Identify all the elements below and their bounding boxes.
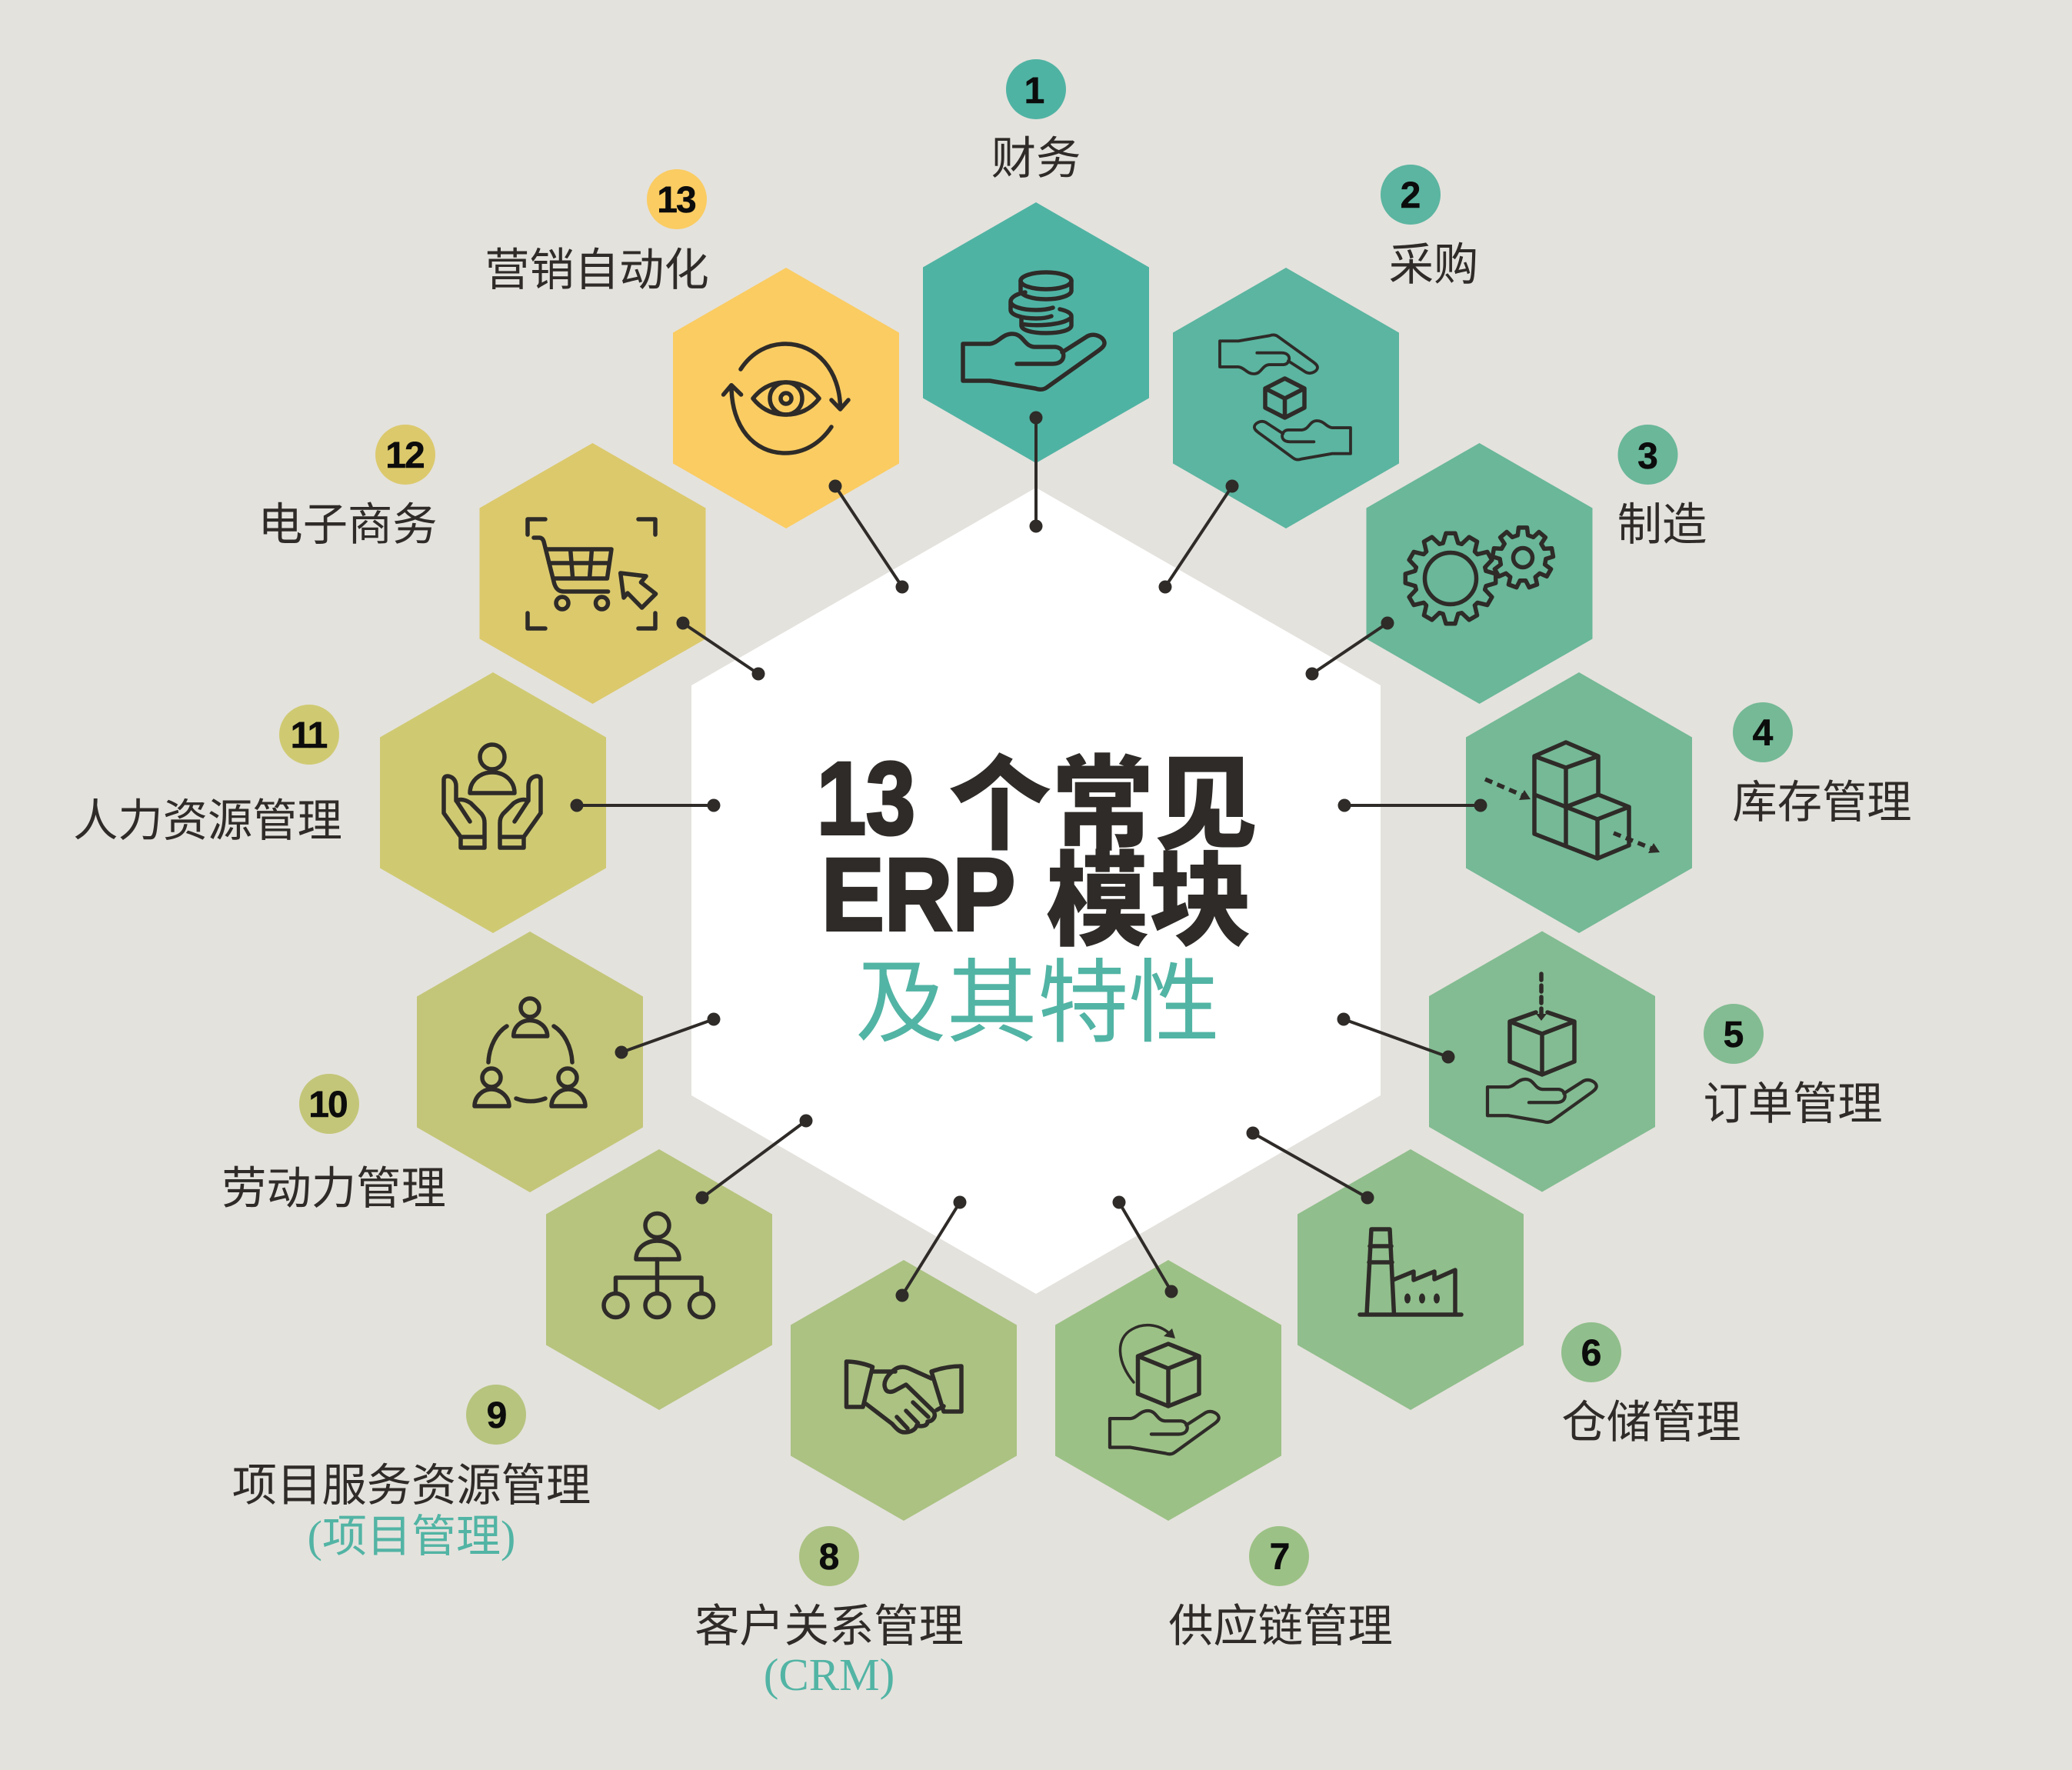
badge 7: 7 — [1270, 1537, 1290, 1578]
icon: handshake — [846, 1362, 961, 1432]
badge 11 — [279, 705, 339, 765]
badge 12: 12 — [385, 435, 424, 476]
label 11: 人力资源管理 — [73, 796, 342, 846]
hexagon 11 — [380, 672, 606, 933]
panel: module 11 human resources — [73, 672, 720, 933]
badge 7 — [1249, 1526, 1309, 1586]
hexagon 3 — [1366, 443, 1592, 704]
badge 2: 2 — [1401, 175, 1421, 216]
title line 3: 及其特性 — [855, 953, 1220, 1055]
icon: box dropping into hand — [1487, 974, 1597, 1122]
label 9: 项目服务资源管理 — [232, 1461, 591, 1511]
title — [817, 742, 1258, 1055]
title line 1: 13 — [817, 742, 915, 856]
badge 12 — [375, 425, 435, 485]
badge 11: 11 — [291, 715, 328, 756]
title line 2: 模块 — [1046, 845, 1252, 959]
panel: module 5 order management — [1337, 931, 1883, 1192]
badge 1 — [1006, 59, 1066, 119]
icon: factory — [1360, 1229, 1461, 1315]
panel: module 6 warehouse — [1246, 1126, 1741, 1448]
badge 8: 8 — [819, 1537, 839, 1578]
icon: hands exchanging box — [1220, 335, 1351, 460]
label 2: 采购 — [1389, 240, 1478, 290]
label 5: 订单管理 — [1703, 1079, 1883, 1129]
hexagon 8 — [791, 1260, 1017, 1521]
sublabel project management: (项目管理) — [308, 1512, 515, 1562]
icon: stacked boxes with arrows — [1485, 742, 1660, 858]
connector 13 — [829, 480, 909, 594]
badge 6: 6 — [1581, 1333, 1601, 1374]
badge 13 — [647, 169, 707, 229]
badge 9: 9 — [487, 1395, 507, 1436]
badge 6 — [1561, 1322, 1621, 1382]
label 3: 制造 — [1617, 500, 1707, 550]
badge 2 — [1381, 165, 1441, 225]
connector 10 — [615, 1012, 720, 1058]
connector 7 — [1112, 1195, 1178, 1298]
label 13: 营销自动化 — [485, 245, 709, 295]
connector 8 — [895, 1195, 966, 1302]
label 4: 库存管理 — [1732, 778, 1912, 828]
title line 2: ERP — [821, 838, 1014, 952]
connector 5 — [1337, 1012, 1455, 1063]
connector 6 — [1246, 1126, 1374, 1205]
hexagon 5 — [1429, 931, 1655, 1192]
hexagon 2 — [1173, 268, 1399, 528]
icon: gears — [1405, 528, 1554, 624]
panel: module 1 finance — [923, 59, 1149, 532]
badge 10 — [299, 1074, 359, 1134]
icon: hands holding person — [444, 745, 541, 848]
hexagon 4 — [1466, 672, 1692, 933]
badge 5 — [1704, 1004, 1764, 1064]
label 12: 电子商务 — [258, 500, 438, 550]
panel: module 10 workforce — [222, 932, 720, 1214]
badge 8 — [799, 1526, 859, 1586]
badge 1: 1 — [1024, 71, 1044, 112]
hexagon 7 — [1055, 1260, 1281, 1521]
icon: eye with cycle arrows — [724, 344, 848, 453]
connector 2 — [1158, 480, 1238, 594]
icon: team circle — [475, 998, 585, 1106]
connector 1 — [1029, 411, 1043, 532]
title line 1: 个常见 — [948, 748, 1258, 863]
icon: coins over hand — [963, 272, 1104, 389]
center white hexagon — [691, 488, 1381, 1294]
connector 4 — [1338, 798, 1487, 812]
hexagon 1 — [923, 202, 1149, 463]
connector 11 — [571, 798, 720, 812]
label 1: 财务 — [991, 134, 1081, 184]
badge 10: 10 — [308, 1085, 347, 1125]
hexagon 6 — [1297, 1149, 1524, 1410]
hexagon 9 — [546, 1149, 772, 1410]
badge 3: 3 — [1637, 436, 1658, 477]
panel: module 3 manufacturing — [1306, 425, 1707, 704]
sublabel CRM: (CRM) — [764, 1649, 894, 1700]
connector 3 — [1306, 617, 1394, 680]
icon: rotating box over hand — [1110, 1325, 1219, 1454]
badge 13: 13 — [657, 180, 695, 221]
label 6: 仓储管理 — [1561, 1398, 1741, 1448]
panel: module 9 project services — [232, 1114, 812, 1562]
badge 4: 4 — [1753, 713, 1774, 754]
badge 3 — [1618, 425, 1678, 485]
badge 9 — [466, 1385, 526, 1445]
panel: module 13 marketing automation — [485, 169, 909, 594]
hexagon 12 — [480, 443, 706, 704]
panel: module 7 supply chain — [1055, 1195, 1393, 1652]
label 10: 劳动力管理 — [222, 1164, 446, 1214]
panel: module 4 inventory — [1338, 672, 1912, 933]
icon: org chart — [604, 1214, 714, 1317]
connector 9 — [695, 1114, 812, 1205]
hexagon 10 — [417, 932, 643, 1192]
label 8: 客户关系管理 — [695, 1602, 964, 1652]
panel: module 2 procurement — [1158, 165, 1478, 594]
label 7: 供应链管理 — [1168, 1602, 1393, 1652]
panel: module 8 CRM — [695, 1195, 1017, 1700]
icon: shopping cart with cursor — [528, 519, 656, 628]
badge 4 — [1733, 702, 1793, 762]
badge 5: 5 — [1724, 1015, 1744, 1055]
panel: module 12 e-commerce — [258, 425, 765, 704]
connector 12 — [677, 617, 765, 680]
hexagon 13 — [673, 268, 899, 528]
